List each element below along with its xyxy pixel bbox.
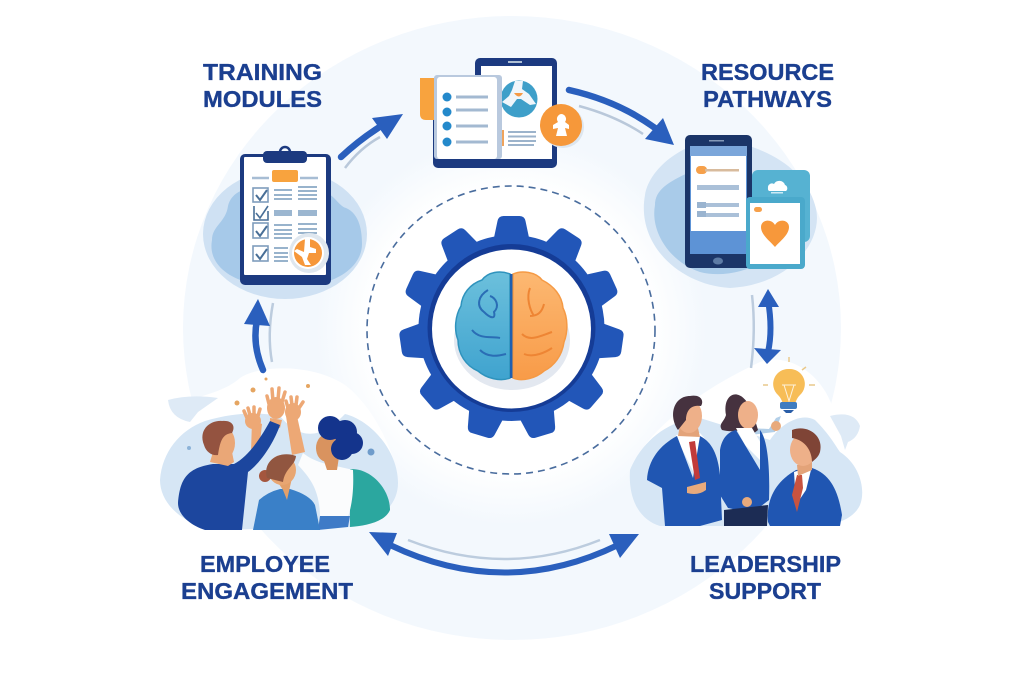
back paper bbox=[434, 75, 502, 159]
confetti bbox=[187, 378, 374, 456]
front card with heart bbox=[746, 197, 805, 269]
background circle bbox=[183, 16, 841, 640]
heading: leadership support: SUPPORT bbox=[709, 578, 821, 604]
clipboard board bbox=[240, 154, 331, 285]
dashed orbit ring bbox=[367, 186, 655, 474]
phone sheet bbox=[690, 146, 747, 156]
arrow: resources and leadership bbox=[751, 289, 781, 368]
backdrop blob bbox=[630, 418, 862, 526]
orange puzzle badge bbox=[540, 104, 584, 148]
heading: training modules bbox=[203, 59, 322, 112]
phone content card bbox=[691, 156, 746, 231]
pale blob left bbox=[168, 396, 218, 422]
phone home button bbox=[713, 258, 723, 264]
heading: resource pathways bbox=[701, 59, 834, 112]
heading: training modules: TRAINING bbox=[203, 59, 322, 85]
inner white halo bbox=[316, 135, 706, 525]
panel: tablet and documents bbox=[420, 58, 584, 168]
right man bbox=[768, 428, 842, 526]
checklist rows bbox=[253, 187, 317, 261]
brain midline bbox=[510, 274, 512, 378]
panel: employee engagement team bbox=[160, 368, 398, 530]
backdrop blob bbox=[203, 169, 367, 299]
inner cloud bbox=[211, 189, 362, 282]
phone body bbox=[685, 135, 752, 268]
backdrop blob bbox=[644, 140, 817, 288]
curly navy hair bbox=[318, 416, 363, 460]
panel: leadership support team bbox=[630, 357, 862, 526]
back teal card bbox=[752, 170, 810, 242]
brain right hemisphere bbox=[513, 272, 567, 380]
white halo bbox=[645, 360, 855, 500]
arrow: training to tablet bbox=[341, 114, 403, 168]
center woman bbox=[720, 394, 769, 526]
lightbulb bbox=[763, 357, 815, 413]
center figure bbox=[253, 454, 320, 530]
screen speaker bbox=[508, 61, 522, 63]
arrow: engagement to training bbox=[244, 299, 273, 370]
heading: resource pathways: RESOURCE bbox=[701, 59, 834, 85]
orange badge bbox=[289, 233, 329, 273]
woman raised arm bbox=[748, 416, 781, 435]
front paper list bbox=[437, 77, 497, 159]
right person arm and hand bbox=[285, 397, 305, 455]
tablet screen bbox=[481, 66, 552, 159]
tablet body bbox=[433, 58, 557, 168]
gear bbox=[398, 216, 625, 441]
orange header tag bbox=[252, 170, 318, 182]
panel: training modules clipboard bbox=[203, 147, 367, 299]
globe bbox=[500, 80, 538, 118]
teal figure bbox=[350, 469, 390, 527]
woman neck and head bbox=[316, 434, 340, 470]
clip bbox=[263, 147, 307, 163]
left hand and arm bbox=[244, 407, 262, 452]
orange tag bbox=[420, 78, 449, 120]
heading: employee engagement bbox=[181, 551, 353, 604]
white halo bbox=[165, 368, 395, 500]
left man bbox=[647, 396, 722, 526]
inner cloud bbox=[654, 170, 790, 274]
panel: phone and cards bbox=[644, 135, 817, 288]
paper bbox=[244, 157, 326, 275]
backdrop blob bbox=[160, 413, 398, 530]
brain shadow bbox=[454, 290, 570, 390]
heading: employee engagement: ENGAGEMENT bbox=[181, 578, 353, 604]
white shirt woman bbox=[298, 453, 353, 518]
pale blob right bbox=[830, 414, 860, 450]
screen text lines bbox=[497, 130, 536, 146]
raised central hand bbox=[267, 388, 285, 428]
arrow: tablet to resources bbox=[569, 90, 674, 145]
heading: training modules: MODULES bbox=[203, 86, 322, 112]
heading: leadership support: LEADERSHIP bbox=[690, 551, 841, 577]
man in suit bbox=[178, 421, 280, 530]
heading: employee engagement: EMPLOYEE bbox=[200, 551, 330, 577]
lower blue of woman bbox=[318, 516, 350, 530]
brain left hemisphere bbox=[456, 272, 510, 380]
heading: leadership support bbox=[690, 551, 841, 604]
heading: resource pathways: PATHWAYS bbox=[703, 86, 832, 112]
central gear with brain bbox=[398, 216, 625, 441]
phone screen bbox=[690, 146, 747, 254]
arrow: leadership and engagement bbox=[369, 532, 639, 572]
